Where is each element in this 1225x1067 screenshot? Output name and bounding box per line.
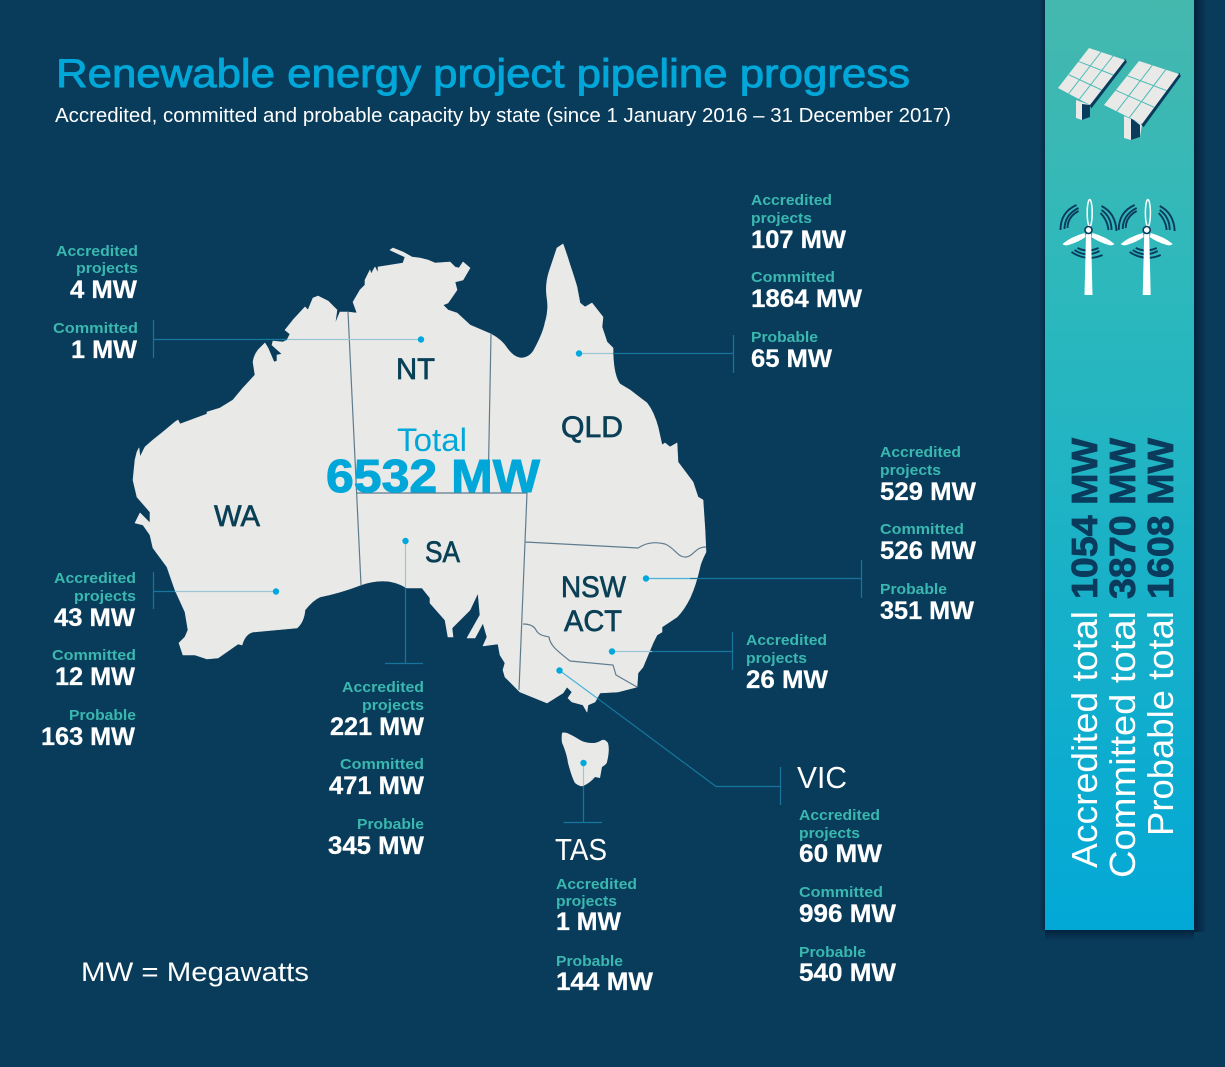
data: QLD: 1864 MW [751, 285, 862, 313]
data: NT: Accredited [56, 243, 138, 260]
data: NSW: 529 MW [880, 478, 976, 506]
callout line: QLD [576, 335, 734, 373]
data: SA: projects [362, 697, 424, 714]
callout line: VIC [556, 667, 780, 805]
probable total [1140, 438, 1181, 836]
data: QLD: Probable [751, 329, 818, 346]
state label: ACT: ACT [564, 605, 622, 638]
state label: QLD: QLD [561, 411, 623, 444]
callout line: ACT [609, 632, 732, 670]
data: TAS: 144 MW [556, 968, 653, 996]
callout line: NSW [643, 560, 862, 598]
data: TAS: Probable [556, 953, 623, 970]
callout line: SA [385, 538, 423, 664]
data: VIC: VIC [797, 760, 847, 795]
data: QLD: 107 MW [751, 226, 846, 254]
committed total: Committed total [1102, 611, 1143, 878]
state label: NT: NT [396, 353, 435, 386]
data: NT [53, 243, 138, 364]
data: QLD: projects [751, 210, 812, 227]
data: VIC [797, 760, 896, 987]
data: WA: 163 MW [41, 723, 135, 751]
probable total: 1608 MW [1140, 438, 1181, 599]
callout line: WA [153, 572, 279, 609]
data: VIC: Accredited [799, 807, 880, 824]
callout line: NT [153, 320, 424, 358]
data: QLD: Accredited [751, 192, 832, 209]
data: WA: 43 MW [54, 604, 135, 632]
data: ACT: Accredited [746, 632, 827, 649]
data: VIC: 540 MW [799, 959, 896, 987]
data: NT: Committed [53, 320, 138, 337]
data: VIC: 60 MW [799, 840, 882, 868]
data: NSW: 526 MW [880, 537, 976, 565]
icon: solar panels [1058, 48, 1180, 140]
data: NSW: Committed [880, 521, 964, 538]
data: NSW: Probable [880, 581, 947, 598]
data: NSW: Accredited [880, 444, 961, 461]
accredited total: Accredited total [1064, 611, 1105, 868]
data: NT: 4 MW [70, 276, 137, 304]
legend: MW definition: MW = Megawatts [81, 957, 309, 987]
data: WA [41, 570, 136, 751]
accredited total [1064, 438, 1105, 868]
data: QLD: 65 MW [751, 345, 832, 373]
data: TAS: TAS [555, 832, 607, 867]
data: NT: projects [76, 260, 138, 277]
data: TAS: 1 MW [556, 908, 621, 936]
title: Renewable energy project pipeline progress [56, 52, 910, 96]
data: NSW [880, 444, 976, 625]
data: ACT: 26 MW [746, 666, 828, 694]
data: WA: projects [74, 588, 136, 605]
subtitle: Accredited, committed and probable capacity by state (since 1 January 2016 – 31 December 2017) [55, 105, 951, 127]
data: SA: 471 MW [329, 772, 424, 800]
state label: WA: WA [214, 500, 260, 533]
map of Australia [133, 244, 706, 786]
data: TAS [555, 832, 653, 996]
data: VIC: 996 MW [799, 900, 896, 928]
data: SA: Probable [357, 816, 424, 833]
data: VIC: Probable [799, 944, 866, 961]
national total: 6532 MW [326, 450, 541, 502]
data: WA: 12 MW [55, 663, 135, 691]
data: WA: Accredited [54, 570, 136, 587]
committed total [1102, 438, 1143, 878]
callout line: TAS [564, 760, 602, 822]
data: SA: Accredited [342, 679, 424, 696]
probable total: Probable total [1140, 611, 1181, 836]
data: TAS: Accredited [556, 876, 637, 893]
data: WA: Committed [52, 647, 136, 664]
data: NSW: 351 MW [880, 597, 974, 625]
map: state borders [348, 312, 706, 690]
committed total: 3870 MW [1102, 438, 1143, 599]
national total [326, 422, 541, 502]
data: ACT [746, 632, 828, 694]
data: QLD [751, 192, 862, 373]
data: ACT: projects [746, 650, 807, 667]
state label: SA: SA [425, 536, 460, 569]
data: SA: Committed [340, 756, 424, 773]
data: SA [328, 679, 424, 860]
data: SA: 221 MW [330, 713, 424, 741]
data: NSW: projects [880, 462, 941, 479]
data: WA: Probable [69, 707, 136, 724]
accredited total: 1054 MW [1064, 438, 1105, 599]
data: VIC: Committed [799, 884, 883, 901]
icon: wind turbines [1060, 200, 1175, 295]
panel: national totals sidebar [1039, 0, 1207, 941]
data: QLD: Committed [751, 269, 835, 286]
data: SA: 345 MW [328, 832, 424, 860]
national total: Total [397, 422, 467, 458]
state label: NSW: NSW [561, 571, 627, 604]
data: TAS: projects [556, 893, 617, 910]
map: Tasmania [562, 732, 609, 786]
data: VIC: projects [799, 825, 860, 842]
data: NT: 1 MW [71, 336, 137, 364]
